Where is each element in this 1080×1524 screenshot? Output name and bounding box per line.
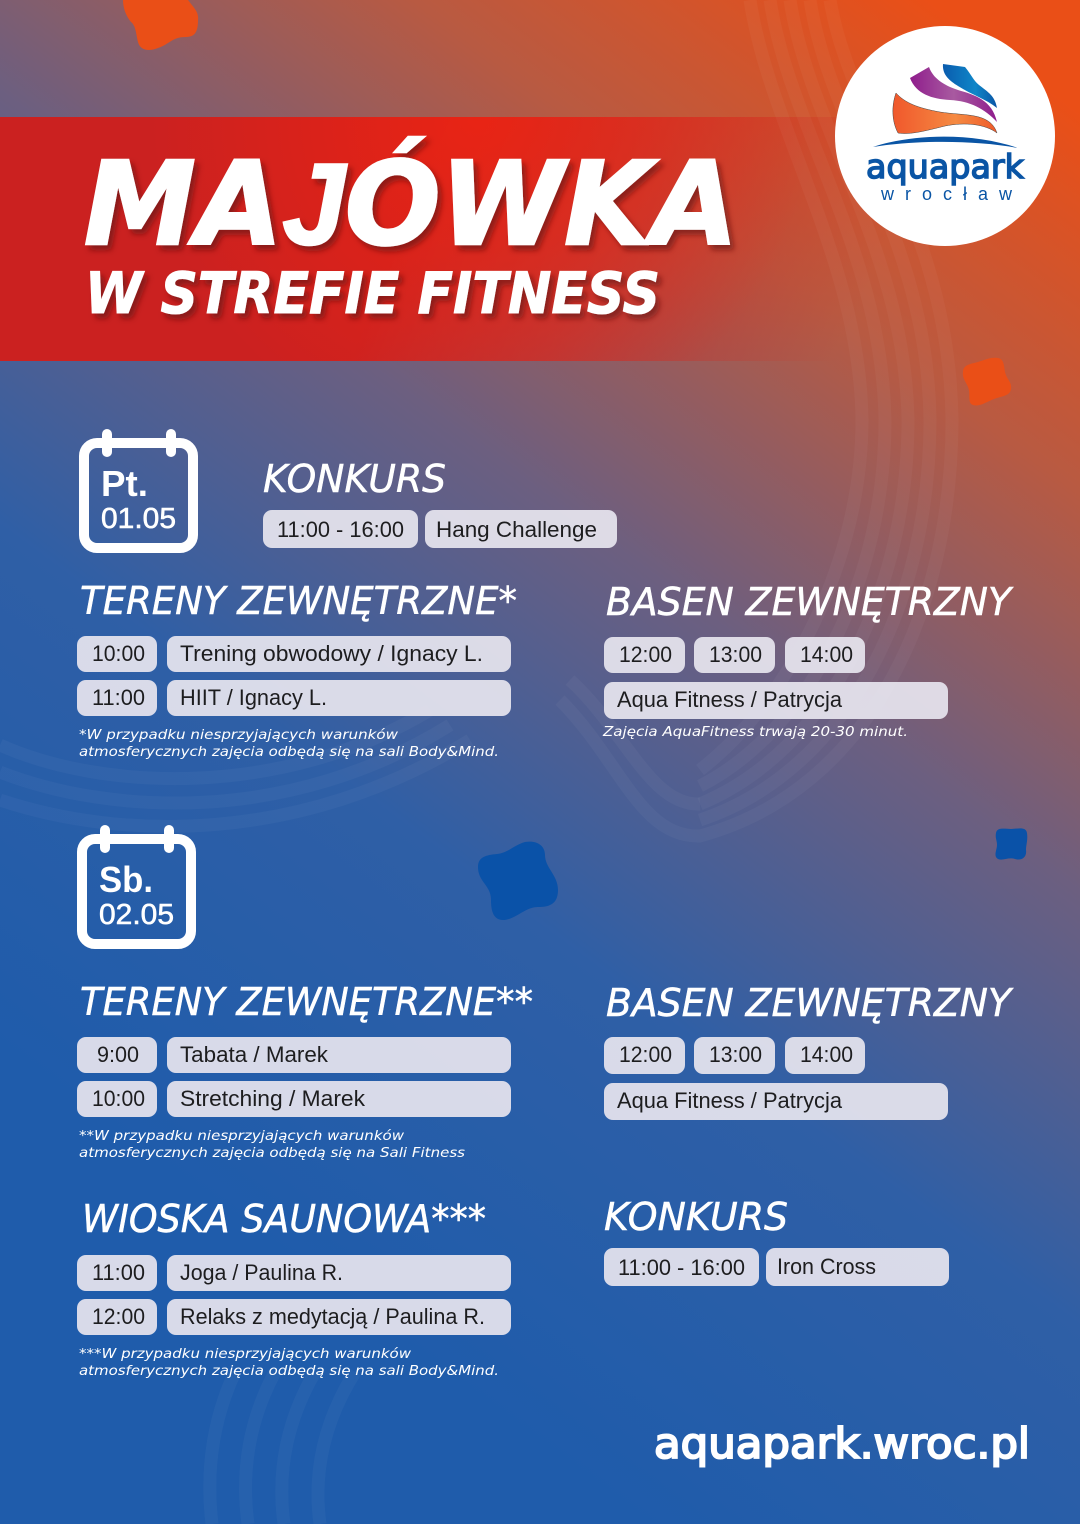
schedule: pool Saturday: 12:00 — [619, 1042, 672, 1067]
schedule: sauna village — [77, 1255, 511, 1335]
schedule: pool Friday: 13:00 — [709, 642, 762, 667]
decorative blob: orange right — [963, 358, 1011, 405]
calendar icon: Friday 01.05 — [84, 429, 193, 548]
schedule: pool Saturday: 14:00 — [800, 1042, 853, 1067]
decorative blob: blue large — [478, 842, 558, 920]
note: outdoor Saturday — [79, 1128, 465, 1161]
schedule: outdoor Saturday: Stretching / Marek — [180, 1086, 366, 1111]
red title band — [0, 117, 836, 361]
calendar icon: Friday 01.05: 01.05 — [101, 503, 176, 535]
note: outdoor Friday: *W przypadku niesprzyjających warunków — [79, 727, 399, 743]
schedule: pool Saturday — [604, 1037, 948, 1120]
website address: aquapark.wroc.pl — [654, 1419, 1030, 1468]
logo wordmark: aquapark — [866, 147, 1025, 186]
calendar icon: Friday 01.05: Pt. — [101, 463, 148, 504]
schedule: outdoor Friday: 10:00 — [92, 641, 145, 666]
schedule: outdoor Friday — [77, 636, 511, 716]
schedule: sauna village: 11:00 — [92, 1260, 145, 1285]
contest Friday row: 11:00 - 16:00 — [277, 517, 404, 542]
heading: wioska saunowa: WIOSKA SAUNOWA*** — [82, 1197, 486, 1241]
schedule: pool Saturday: 13:00 — [709, 1042, 762, 1067]
contest Saturday row: Iron Cross — [777, 1254, 876, 1279]
logo wave: purple — [910, 67, 997, 122]
contest Saturday row: 11:00 - 16:00 — [618, 1255, 745, 1280]
schedule: pool Friday: 14:00 — [800, 642, 853, 667]
note: pool Friday: Zajęcia AquaFitness trwają 20-30 minut. — [602, 724, 908, 740]
calendar icon: Saturday 02.05: Sb. — [99, 859, 153, 900]
heading: tereny zewnetrzne Friday: TERENY ZEWNĘTRZNE* — [80, 579, 517, 623]
schedule: outdoor Friday: HIIT / Ignacy L. — [180, 685, 327, 710]
note: sauna village: ***W przypadku niesprzyjających warunków — [79, 1346, 412, 1362]
contest Friday row — [263, 510, 617, 548]
note: outdoor Friday: atmosferycznych zajęcia odbędą się na sali Body&Mind. — [79, 744, 499, 760]
note: sauna village: atmosferycznych zajęcia odbędą się na sali Body&Mind. — [79, 1363, 499, 1379]
logo subtitle: wrocław — [880, 184, 1013, 204]
heading: konkurs Friday: KONKURS — [263, 457, 446, 501]
heading: konkurs Saturday: KONKURS — [604, 1195, 788, 1239]
schedule: pool Saturday: Aqua Fitness / Patrycja — [617, 1088, 842, 1113]
schedule: outdoor Friday: 11:00 — [92, 685, 145, 710]
note: outdoor Saturday: **W przypadku niesprzyjających warunków — [79, 1128, 405, 1144]
calendar icon: Saturday 02.05 — [82, 825, 191, 944]
heading: basen Friday: BASEN ZEWNĘTRZNY — [606, 580, 1014, 624]
decorative blob: orange top — [123, 0, 198, 50]
logo wave: orange — [893, 93, 997, 134]
schedule: sauna village: Joga / Paulina R. — [180, 1260, 343, 1285]
schedule: outdoor Saturday: 10:00 — [92, 1086, 145, 1111]
schedule: sauna village: Relaks z medytacją / Paulina R. — [180, 1304, 485, 1329]
note: outdoor Saturday: atmosferycznych zajęcia odbędą się na Sali Fitness — [79, 1145, 465, 1161]
subtitle: W STREFIE FITNESS — [85, 261, 660, 327]
logo arc — [873, 137, 1018, 148]
schedule: pool Friday: 12:00 — [619, 642, 672, 667]
note: sauna village — [79, 1346, 499, 1379]
main title: MAJÓWKA — [84, 136, 738, 272]
decorative blob: blue right — [995, 828, 1027, 860]
schedule: outdoor Saturday: 9:00 — [97, 1042, 139, 1067]
calendar icon: Saturday 02.05: 02.05 — [99, 899, 174, 931]
schedule: sauna village: 12:00 — [92, 1304, 145, 1329]
schedule: outdoor Saturday: Tabata / Marek — [180, 1042, 329, 1067]
contest Friday row: Hang Challenge — [436, 517, 597, 542]
note: outdoor Friday — [79, 727, 499, 760]
schedule: pool Friday — [604, 637, 948, 719]
contest Saturday row — [604, 1248, 949, 1286]
schedule: pool Friday: Aqua Fitness / Patrycja — [617, 687, 842, 712]
heading: tereny zewnetrzne Saturday: TERENY ZEWNĘTRZNE** — [80, 980, 533, 1024]
schedule: outdoor Saturday — [77, 1037, 511, 1117]
logo badge — [835, 26, 1055, 246]
heading: basen Saturday: BASEN ZEWNĘTRZNY — [606, 981, 1014, 1025]
schedule: outdoor Friday: Trening obwodowy / Ignacy L. — [180, 641, 483, 666]
logo wave: blue — [943, 64, 997, 108]
